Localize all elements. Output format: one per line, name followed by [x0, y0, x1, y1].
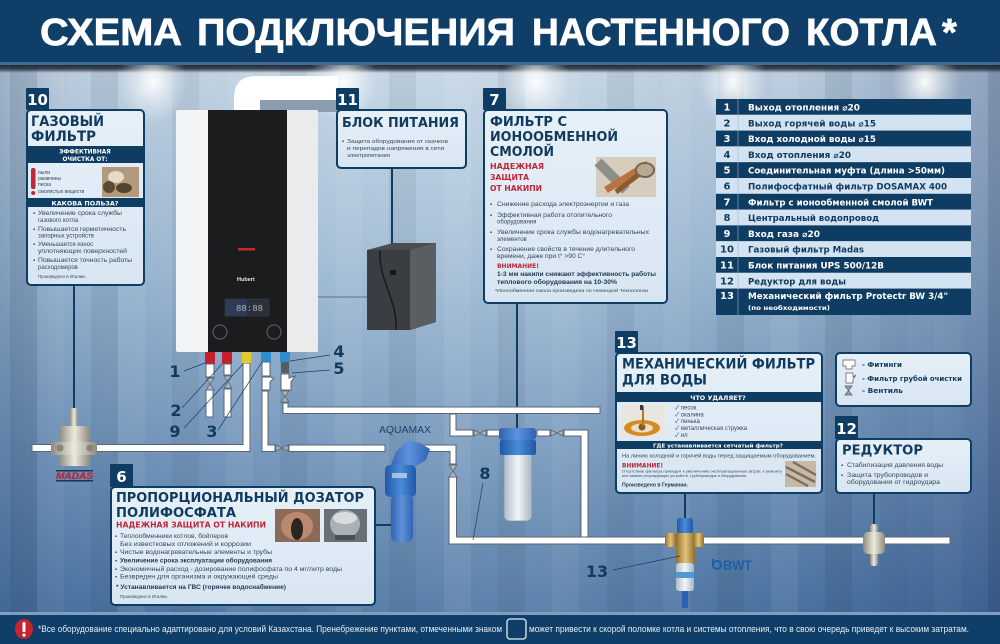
heading: МЕХАНИЧЕСКИЙ ФИЛЬТР: [622, 356, 815, 372]
benefits list: [115, 533, 342, 599]
heading: [31, 113, 104, 145]
marker box: [507, 619, 526, 639]
pipes: heating return: [280, 352, 600, 537]
benefits list: Повышается точность работы: [38, 258, 132, 264]
removal list: [675, 404, 748, 439]
table labels: Вход холодной воды ⌀15: [748, 134, 876, 144]
heading: ИОНООБМЕННОЙ: [490, 128, 618, 145]
text: Защита трубопроводов и: [847, 473, 928, 479]
band: where installed: [616, 441, 822, 450]
pressure reducer: [863, 524, 885, 566]
benefits list: * Устанавливается на ГВС (горячее водоснабжение): [116, 584, 286, 591]
photo: before: [275, 509, 320, 542]
contaminants list: пыли: [38, 170, 50, 176]
table labels: Выход отопления ⌀20: [748, 102, 860, 112]
icon: coarse filter: [846, 373, 856, 383]
benefits list: Экономичный расход - дозирование полифосфата по 4 мг/литр воды: [120, 566, 342, 573]
part number labels: 1: [169, 362, 181, 381]
photo: banknotes: [785, 461, 816, 487]
benefits list: запорных устройств: [38, 232, 94, 240]
table numbers: 10: [720, 245, 734, 256]
title: СХЕМА: [40, 12, 182, 54]
text: электропитания: [347, 153, 390, 159]
table labels: Газовый фильтр Madas: [748, 245, 864, 255]
band: cleaning: ОЧИСТКА ОТ:: [62, 157, 108, 163]
contaminants list: песка: [38, 182, 51, 188]
photo: rusty sink: [621, 405, 665, 437]
benefits list: Произведено в Италии.: [38, 274, 86, 279]
central water main pipe: [449, 477, 950, 544]
text: ▪: [841, 473, 843, 479]
warning: ВНИМАНИЕ!: [497, 263, 539, 270]
warning: 1-3 мм накипи снижают эффективность работы: [497, 270, 656, 278]
text: ▪: [342, 139, 344, 145]
benefits list: ▪: [490, 230, 492, 236]
title: КОТЛА: [806, 12, 937, 54]
legend labels: - Вентиль: [862, 386, 903, 395]
benefits list: Без известковых отложений и коррозии: [120, 541, 251, 548]
benefits list: ▪: [115, 558, 117, 564]
panel 13: mechanical filter: 13: [616, 334, 637, 352]
table labels: [748, 102, 948, 312]
band: cleaning: [27, 146, 144, 163]
part number labels: [169, 342, 680, 581]
warning: Отсутствие фильтра приводит к увеличению эксплуатационных затрат, к ремонту: [622, 470, 782, 474]
panel 6: polyphosphate dispenser: [110, 464, 375, 605]
panel 7: ion exchange filter: [483, 88, 667, 303]
panel 6: polyphosphate dispenser: 6: [116, 468, 127, 486]
panel 12: pressure reducer: 12: [836, 420, 857, 438]
benefits list: Снижение расхода электроэнергии и газа: [497, 202, 630, 208]
table numbers: 13: [720, 291, 734, 302]
benefits list: Чистые водонагревательные элементы и трубы: [120, 550, 272, 556]
text: и перепадов напряжения в сети: [347, 146, 444, 152]
subheading: НАДЕЖНАЯ: [490, 162, 544, 171]
contaminants list: [38, 170, 85, 195]
table numbers: 7: [724, 197, 731, 208]
white duct above boiler: [234, 76, 338, 112]
table labels: Фильтр с ионообменной смолой BWT: [748, 197, 933, 207]
benefits list: оборудования: [497, 220, 536, 226]
band: benefit: КАКОВА ПОЛЬЗА?: [51, 200, 119, 208]
part number labels: 2: [170, 401, 182, 420]
boiler: Hubert: [237, 277, 255, 283]
removal list: ✓ пенька: [675, 418, 701, 425]
heading: ДЛЯ ВОДЫ: [622, 372, 707, 388]
logo: BWT: BWT: [723, 557, 752, 573]
heading: ФИЛЬТР: [31, 129, 96, 145]
panel 10: gas filter: 10: [27, 91, 48, 109]
table numbers: 6: [724, 182, 731, 192]
benefits list: ▪: [115, 567, 117, 573]
table numbers: 9: [724, 229, 731, 240]
benefits list: [490, 202, 649, 260]
benefits list: Произведено в Италии.: [120, 594, 168, 599]
header band: [0, 0, 1000, 65]
benefits list: ▪: [115, 534, 117, 540]
benefits list: расходомеров: [38, 265, 78, 271]
contaminants list: смолистых веществ: [38, 189, 85, 195]
heading: [490, 114, 618, 160]
table numbers: 1: [724, 102, 731, 114]
contaminants list: ржавчины: [38, 176, 61, 182]
part number labels: 4: [333, 342, 345, 361]
photo: debris: [102, 167, 139, 197]
panel 7: ion exchange filter: 7: [489, 91, 500, 109]
benefits list: ▪: [33, 258, 35, 264]
benefits list: Эффективная работа отопительного: [497, 213, 613, 219]
warning: *Ионообменная смола произведена по Немецкой Технологии: [495, 287, 648, 293]
table numbers: 3: [724, 134, 731, 145]
table labels: Вход газа ⌀20: [748, 229, 820, 239]
subheading: [490, 162, 544, 193]
photo: after: [324, 509, 367, 542]
brand: Aquamax: AQUAMAX: [379, 425, 431, 436]
table numbers: 11: [720, 260, 734, 272]
benefits list: ▪: [33, 242, 35, 248]
title: НАСТЕННОГО: [532, 12, 790, 54]
ion exchange filter housing: [499, 428, 536, 521]
benefits list: элементов: [497, 237, 527, 243]
warning: Произведено в Германии.: [622, 482, 689, 488]
band: where installed: ГДЕ устанавливается сетчатый фильтр?: [653, 442, 783, 450]
footnote left: *Все оборудование специально адаптировано для условий Казахстана. Пренебрежение пунктами, отмеченными знаком: [38, 624, 502, 634]
part number labels: 3: [206, 422, 218, 441]
table labels: (по необходимости): [748, 304, 830, 312]
legend labels: [862, 360, 962, 395]
table labels: Механический фильтр Protectr BW 3/4": [748, 291, 948, 301]
table labels: Редуктор для воды: [748, 276, 846, 286]
text: оборудования от гидроудара: [847, 480, 941, 486]
benefits list: Увеличение срока службы водонагревательных: [497, 230, 649, 236]
heading: ФИЛЬТР С: [490, 114, 567, 130]
removal list: ✓ окалина: [675, 412, 704, 418]
benefits list: газового котла: [38, 218, 79, 224]
part number labels: 13: [586, 562, 608, 581]
heading: [116, 489, 364, 530]
warning mark: [31, 168, 36, 195]
title: *: [942, 12, 957, 54]
heading: СМОЛОЙ: [490, 143, 554, 160]
legend panel: [836, 353, 971, 406]
text: Защита оборудования от скачков: [347, 139, 448, 145]
benefits list: [33, 211, 132, 279]
boiler: 88:88: [236, 304, 263, 314]
title: ПОДКЛЮЧЕНИЯ: [197, 12, 515, 54]
table labels: Соединительная муфта (длина >50мм): [748, 166, 945, 176]
band: benefit: [27, 198, 144, 208]
table numbers: 2: [724, 118, 731, 129]
panel 11: power unit: 11: [337, 91, 358, 109]
text: [342, 139, 448, 159]
ceiling shadow: [0, 64, 1000, 73]
benefits list: Безвреден для организма и окружающей среды: [120, 574, 278, 580]
pipes: heating and hot water outlets: [205, 352, 232, 417]
panel 12: pressure reducer: [835, 416, 971, 493]
warning: ВНИМАНИЕ!: [622, 464, 663, 470]
table numbers: 12: [720, 276, 734, 287]
table numbers: 5: [724, 166, 731, 177]
benefits list: Увеличение срока службы: [38, 211, 122, 217]
installation text: На линию холодной и горячей воды перед защищаемым оборудованием.: [622, 452, 816, 460]
legend labels: - Фильтр грубой очистки: [862, 374, 962, 383]
benefits list: ▪: [490, 202, 492, 208]
benefits list: времени, даже при t° >90 С°: [497, 254, 586, 260]
subheading: ОТ НАКИПИ: [490, 184, 542, 193]
UPS: [367, 243, 436, 330]
part number labels: 9: [169, 422, 181, 441]
benefits list: ▪: [490, 247, 492, 253]
icon: valve: [845, 386, 852, 395]
cable to UPS: [318, 296, 368, 298]
panel 13: mechanical filter: [615, 331, 822, 493]
benefits list: Увеличение срока эксплуатации оборудования: [120, 558, 273, 564]
photo: scaled pipes: [596, 157, 656, 197]
removal list: ✓ песок: [675, 404, 697, 412]
table numbers: [720, 102, 734, 302]
table labels: Центральный водопровод: [748, 213, 879, 223]
warning: или замене регулирующих устройств, трубопроводов и оборудования.: [622, 474, 747, 478]
table numbers: 8: [724, 213, 731, 224]
benefits list: ▪: [115, 550, 117, 556]
panel 10: gas filter: [26, 88, 144, 285]
table labels: Вход отопления ⌀20: [748, 150, 851, 160]
part number labels: 8: [479, 464, 491, 483]
footnote right: может привести к скорой поломке котла и системы отопления, что в свою очередь приведет к высоким затратам.: [529, 624, 969, 634]
logo: Madas: MADAS: [56, 471, 93, 481]
subheading: ЗАЩИТА: [490, 173, 530, 182]
connector lines: [74, 168, 874, 525]
benefits list: ▪: [115, 574, 117, 580]
removal list: ✓ металлическая стружка: [675, 425, 748, 432]
heading: ПРОПОРЦИОНАЛЬНЫЙ ДОЗАТОР: [116, 489, 364, 506]
pipes: cold water inlet: [261, 352, 457, 477]
table labels: Блок питания UPS 500/12В: [748, 260, 884, 270]
heading: ГАЗОВЫЙ: [31, 113, 104, 130]
panel 11: power unit: [336, 88, 466, 168]
part number labels: 5: [333, 359, 345, 378]
gas filter Madas: [51, 408, 97, 482]
band: cleaning: ЭФФЕКТИВНАЯ: [59, 150, 111, 156]
heading: [622, 356, 815, 388]
warning: [495, 263, 656, 293]
ceiling lights: [119, 40, 959, 124]
benefits list: Повышается герметичность: [38, 227, 126, 233]
boiler: [176, 110, 318, 352]
warning: теплового оборудования на 10-30%: [497, 278, 617, 286]
warning icon: [15, 619, 33, 639]
band: what it removes: ЧТО УДАЛЯЕТ?: [690, 394, 746, 402]
pipes: gas: [32, 352, 251, 452]
benefits list: ▪: [33, 211, 35, 217]
table labels: Полифосфатный фильтр DOSAMAX 400: [748, 182, 947, 192]
benefits list: уплотняющих поверхностей: [38, 248, 127, 255]
heading: ПОЛИФОСФАТА: [116, 505, 237, 521]
text: ▪: [841, 463, 843, 469]
title: [40, 12, 957, 54]
heading: НАДЕЖНАЯ ЗАЩИТА ОТ НАКИПИ: [116, 520, 266, 530]
polyphosphate filter (blue): [385, 440, 430, 542]
benefits list: ▪: [33, 227, 35, 233]
benefits list: Сохранение свойств в течение длительного: [497, 246, 636, 253]
warning: [622, 464, 782, 488]
legend labels: - Фитинги: [862, 360, 902, 369]
panel 12: pressure reducer: РЕДУКТОР: [842, 442, 923, 458]
table labels: Выход горячей воды ⌀15: [748, 118, 876, 128]
parts table: [716, 99, 971, 315]
benefits list: Уменьшается износ: [38, 242, 93, 248]
table numbers: 4: [724, 150, 731, 161]
footer band: [0, 612, 1000, 644]
removal list: ✓ ил: [675, 432, 688, 439]
text: [841, 463, 943, 486]
benefits list: ▪: [490, 213, 492, 219]
icon: fitting: [843, 360, 855, 369]
benefits list: Теплообменники котлов, бойлеров: [120, 533, 228, 540]
text: Стабилизация давления воды: [847, 463, 943, 469]
band: what it removes: [616, 392, 822, 402]
panel 11: power unit: БЛОК ПИТАНИЯ: [342, 116, 459, 131]
BWT mechanical filter: [665, 518, 704, 608]
